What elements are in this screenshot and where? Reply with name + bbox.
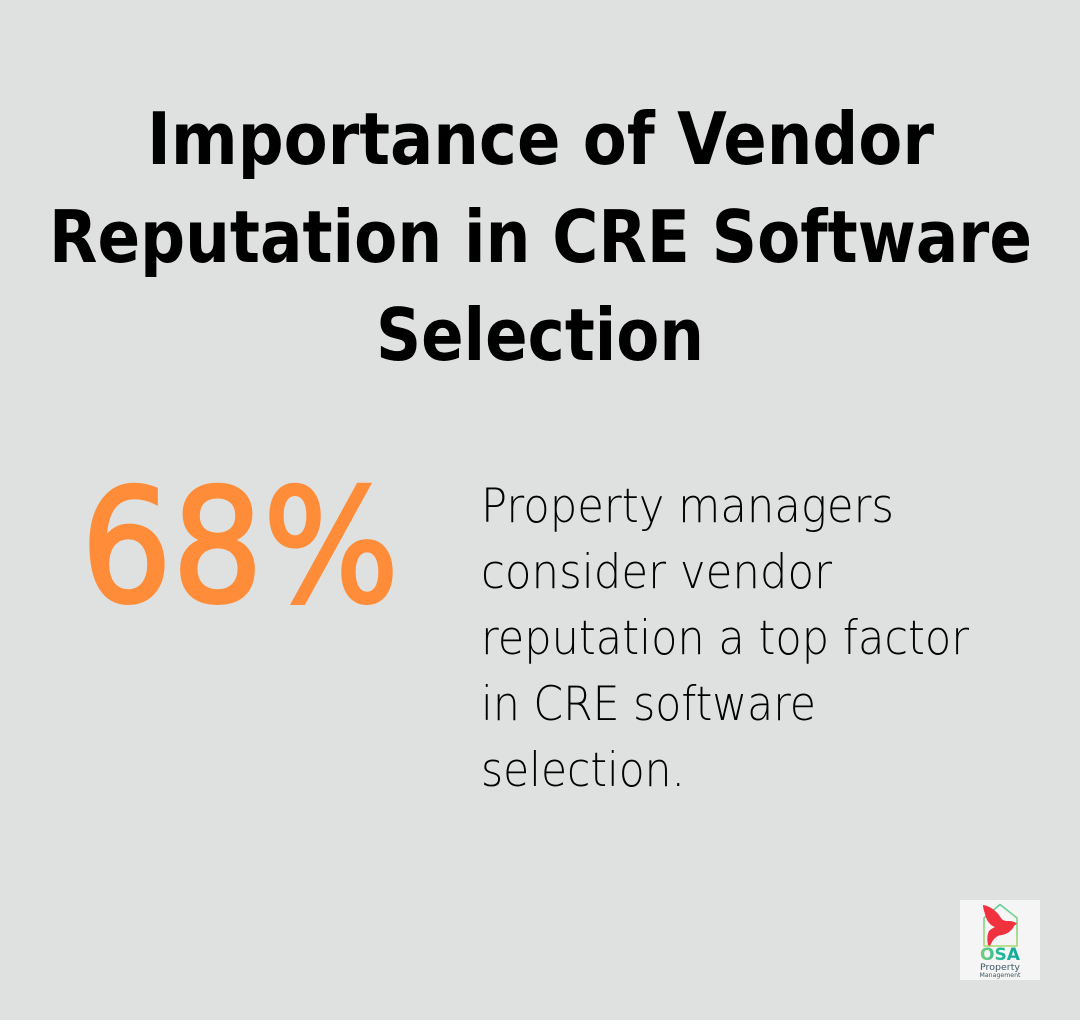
description text: reputation a top factor bbox=[481, 611, 970, 666]
icon: red bird bbox=[983, 905, 1017, 946]
icon: house outline bbox=[984, 904, 1017, 946]
logo wordmark: OSA bbox=[980, 945, 1021, 965]
statistic: 68%: 68% bbox=[81, 456, 399, 639]
title bbox=[49, 97, 1032, 377]
description text: Property managers bbox=[481, 479, 894, 534]
description text bbox=[481, 479, 970, 798]
description text: selection. bbox=[481, 743, 685, 798]
logo: OSA Property Management: Property bbox=[980, 963, 1021, 973]
title: Selection bbox=[376, 293, 704, 377]
description text: consider vendor bbox=[481, 545, 833, 600]
logo: OSA Property Management bbox=[960, 900, 1040, 980]
description text: in CRE software bbox=[481, 677, 816, 732]
logo: OSA Property Management: Management bbox=[980, 972, 1021, 979]
title: Importance of Vendor bbox=[147, 97, 934, 181]
